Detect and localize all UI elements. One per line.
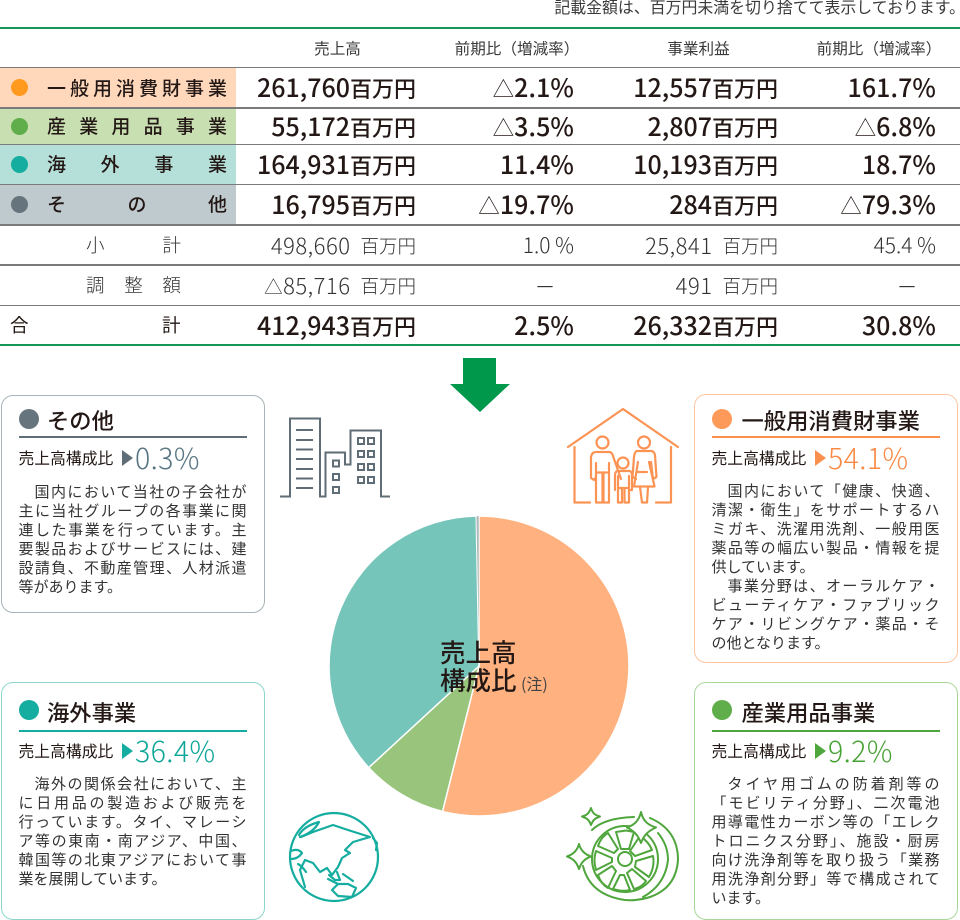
- row 2 values: △3.5%: [493, 108, 574, 144]
- row label: total left: 合: [10, 312, 29, 338]
- slice: consumer 54.1%: [442, 516, 629, 816]
- panel: other: [1, 395, 265, 613]
- heading dot: [19, 700, 39, 720]
- heading rule: [18, 730, 246, 732]
- heading: 海外事業: [47, 696, 136, 728]
- row 4 values: △19.7%: [478, 186, 574, 222]
- row 2 values: 2,807百万円: [648, 108, 778, 144]
- row total values: 2.5%: [514, 307, 574, 343]
- body text: [712, 480, 940, 653]
- share label: 売上高構成比: [18, 446, 113, 469]
- table bottom rule: [0, 344, 960, 346]
- row 2 values: △6.8%: [855, 108, 936, 144]
- label: line 1: 売上高: [440, 633, 517, 670]
- body text: 「モビリティ分野」、二次電池: [712, 792, 940, 813]
- body text: ケア・リビングケア・薬品・そ: [712, 613, 940, 634]
- row 3 values: 10,193百万円: [633, 146, 778, 182]
- row label: subtotal: 小 計: [86, 232, 181, 258]
- body text: 供しています。: [712, 556, 815, 577]
- body text: [18, 773, 246, 889]
- column header: operating profit: 事業利益: [667, 37, 730, 59]
- table top rule: [0, 27, 960, 29]
- heading rule: [712, 436, 940, 438]
- row subtotal values: 1.0 %: [523, 230, 574, 260]
- row 4 values: △79.3%: [840, 186, 936, 222]
- body text: います。: [712, 887, 770, 908]
- body text: 用導電性カーボン等の「エレク: [712, 811, 940, 832]
- arrow: down: [450, 358, 510, 412]
- row label: total right: 計: [162, 312, 181, 338]
- row subtotal values: 25,841 百万円: [645, 229, 778, 261]
- share arrow: [122, 450, 133, 466]
- body text: 主に当社グループの各事業に関: [18, 500, 246, 521]
- body text: 等があります。: [18, 576, 122, 597]
- body text: 向け洗浄剤等を取り扱う「業務: [712, 849, 940, 870]
- row 3 values: 164,931百万円: [257, 146, 416, 182]
- row adjustment values: △85,716 百万円: [264, 269, 416, 301]
- dot: orange: [11, 79, 28, 96]
- share value: 36.4%: [135, 730, 215, 771]
- label: consumer products: 一般用消費財事業: [47, 74, 227, 101]
- row 2 values: [271, 108, 936, 144]
- row 3 values: [257, 146, 936, 182]
- share label: 売上高構成比: [18, 739, 113, 762]
- share arrow: [815, 450, 826, 466]
- slice: other 0.3%: [476, 516, 479, 666]
- row 4 values: 284百万円: [669, 186, 778, 222]
- body text: [18, 481, 246, 597]
- share label: 売上高構成比: [712, 446, 806, 469]
- body text: 設請負、不動産管理、人材派遣: [18, 557, 246, 578]
- panel: overseas: [1, 682, 265, 920]
- body text: 韓国等の北東アジアにおいて事: [18, 849, 246, 870]
- icon: globe: [288, 812, 380, 902]
- row 1 values: [257, 69, 936, 105]
- icon: family in house: [566, 408, 680, 504]
- row 1 values: 161.7%: [847, 69, 936, 105]
- row 4 values: [271, 186, 936, 222]
- row 1 values: △2.1%: [493, 69, 574, 105]
- row 3 values: 18.7%: [862, 146, 936, 182]
- heading dot: [712, 700, 732, 720]
- share value: 9.2%: [828, 730, 893, 771]
- share arrow: [815, 743, 826, 759]
- share label: 売上高構成比: [712, 739, 806, 762]
- body text: ビューティケア・ファブリック: [712, 594, 940, 615]
- row 1 values: 261,760百万円: [257, 69, 416, 105]
- row label: adjustment: 調 整 額: [86, 272, 181, 298]
- dot: green: [11, 118, 28, 135]
- label: other: その他: [47, 190, 227, 217]
- pie chart: sales composition: [330, 516, 628, 816]
- body text: ミガキ、洗濯用洗剤、一般用医: [712, 518, 940, 539]
- row total values: [257, 307, 936, 343]
- heading dot: [712, 409, 732, 429]
- column header: profit change: 前期比（増減率）: [817, 37, 941, 59]
- row subtotal values: 45.4 %: [874, 230, 936, 260]
- label: overseas: 海外事業: [47, 150, 227, 177]
- body text: 用洗浄剤分野」等で構成されて: [712, 868, 940, 889]
- heading: その他: [47, 404, 114, 436]
- share arrow: [122, 743, 133, 759]
- heading rule: [712, 730, 940, 732]
- row label: consumer products: [0, 68, 236, 107]
- panel: consumer products: [694, 394, 958, 663]
- row adjustment values: —: [898, 271, 916, 298]
- share value: 54.1%: [828, 437, 908, 478]
- pie centre label: [440, 633, 548, 698]
- dot: teal: [11, 156, 28, 173]
- body text: に日用品の製造および販売を: [18, 792, 246, 813]
- body text: [712, 773, 940, 908]
- body text: 要製品およびサービスには、建: [18, 538, 246, 559]
- icon: buildings: [280, 418, 390, 498]
- label: note: (注): [521, 671, 548, 695]
- body text: 薬品等の幅広い製品・情報を提: [712, 537, 940, 558]
- body text: 連した事業を行っています。主: [18, 519, 246, 540]
- body text: 海外の関係会社において、主: [34, 773, 246, 794]
- row adjustment values: —: [536, 271, 554, 298]
- slice: industrial 9.2%: [369, 666, 479, 812]
- row total values: 30.8%: [862, 307, 936, 343]
- row adjustment values: [264, 269, 916, 301]
- row label: industrial products: [0, 109, 236, 144]
- row subtotal values: [271, 229, 936, 261]
- column header: sales: 売上高: [314, 37, 361, 59]
- row 1 values: 12,557百万円: [633, 69, 778, 105]
- icon: tyre with sparkles: [566, 807, 679, 902]
- body text: 事業分野は、オーラルケア・: [728, 575, 940, 596]
- body text: 国内において「健康、快適、: [728, 480, 940, 501]
- dot: grey: [11, 196, 28, 213]
- row subtotal values: 498,660 百万円: [271, 229, 416, 261]
- body text: 行っています。タイ、マレーシ: [18, 811, 246, 832]
- slice: overseas 36.4%: [329, 516, 479, 768]
- heading: 一般用消費財事業: [742, 404, 920, 436]
- label: industrial products: 産業用品事業: [47, 112, 227, 139]
- body text: ア等の東南・南アジア、中国、: [18, 830, 246, 851]
- row total values: 412,943百万円: [257, 307, 416, 343]
- body text: トロニクス分野」、施設・厨房: [712, 830, 940, 851]
- body text: 国内において当社の子会社が: [34, 481, 246, 502]
- panel: industrial products: [694, 682, 958, 920]
- heading rule: [18, 436, 246, 438]
- row label: other: [0, 185, 236, 224]
- row adjustment values: 491 百万円: [676, 269, 778, 301]
- share value: 0.3%: [135, 437, 200, 478]
- body text: タイヤ用ゴムの防着剤等の: [728, 773, 940, 794]
- label: line 2: 構成比: [440, 661, 517, 698]
- column header: sales change: 前期比（増減率）: [455, 37, 579, 59]
- body text: の他となります。: [712, 632, 830, 653]
- heading: 産業用品事業: [742, 696, 875, 728]
- body text: 清潔・衛生」をサポートするハ: [712, 499, 940, 520]
- row total values: 26,332百万円: [633, 307, 778, 343]
- body text: 業を展開しています。: [18, 868, 167, 889]
- row 4 values: 16,795百万円: [271, 186, 416, 222]
- table: column headers: [314, 37, 941, 59]
- heading dot: [19, 409, 39, 429]
- row 3 values: 11.4%: [500, 146, 574, 182]
- row 2 values: 55,172百万円: [271, 108, 416, 144]
- row label: overseas: [0, 145, 236, 184]
